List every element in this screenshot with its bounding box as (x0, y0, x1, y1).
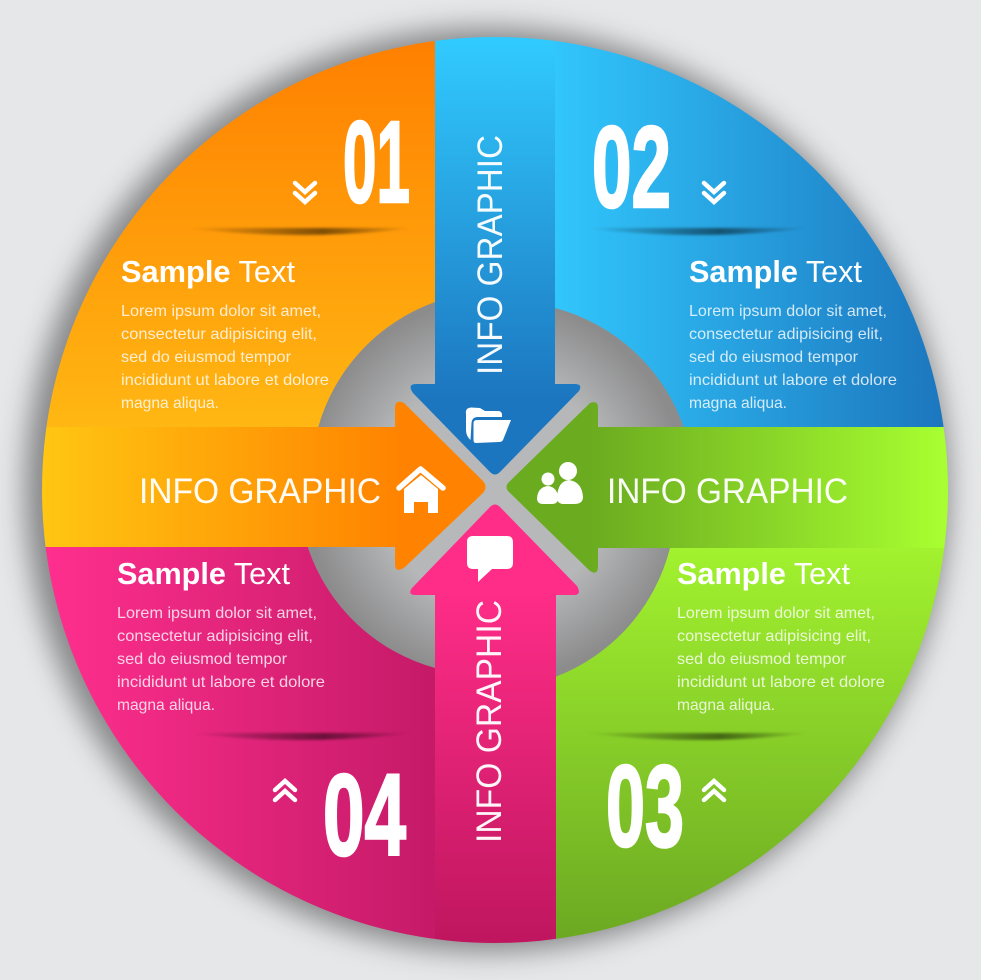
quadrant shape: pink (46, 547, 435, 939)
arrow shape: pink (410, 504, 579, 950)
label: info graphic: INFO GRAPHIC (470, 600, 509, 843)
number 01: 01 (343, 97, 410, 227)
body text (121, 303, 329, 412)
label: info graphic: INFO GRAPHIC (139, 472, 381, 511)
body text: sed do eiusmod tempor (117, 651, 288, 668)
divider shadow (583, 733, 811, 740)
panel: 02 blue quadrant (555, 41, 944, 427)
icon: chevrons down (295, 183, 315, 202)
label: info graphic: INFO GRAPHIC (607, 472, 848, 511)
arrow: orange pointing right (40, 402, 486, 570)
body text (689, 303, 897, 412)
arrow shape: orange (40, 402, 486, 570)
body text: incididunt ut labore et dolore (689, 372, 897, 389)
icon: chevrons down (704, 183, 724, 202)
body text: consectetur adipisicing elit, (677, 628, 871, 645)
body text: sed do eiusmod tempor (689, 349, 859, 366)
arrow shape: blue (411, 30, 580, 474)
body text: magna aliqua. (117, 697, 215, 714)
icon: speech bubble (467, 536, 513, 582)
body text: consectetur adipisicing elit, (121, 326, 317, 343)
panel: 01 orange quadrant (46, 41, 435, 427)
icon: folder (466, 408, 511, 443)
divider shadow (187, 733, 415, 740)
icon: chevrons up (704, 781, 724, 800)
label: info graphic: INFO GRAPHIC (471, 135, 510, 375)
quadrant shape: blue (555, 41, 944, 427)
quadrant shape: green (555, 548, 944, 939)
body text: Lorem ipsum dolor sit amet, (117, 605, 317, 622)
number 03: 03 (606, 741, 684, 871)
panel: 03 green quadrant (555, 548, 944, 939)
body text: consectetur adipisicing elit, (689, 326, 883, 343)
body text: magna aliqua. (121, 395, 219, 412)
body text (677, 605, 885, 714)
panel: 04 pink quadrant (46, 547, 435, 939)
quadrant shape: orange (46, 41, 435, 427)
arrow: pink pointing up (410, 504, 579, 950)
body text: incididunt ut labore et dolore (121, 372, 329, 389)
body text: magna aliqua. (689, 395, 787, 412)
icon: chevrons up (275, 781, 295, 800)
body text: Lorem ipsum dolor sit amet, (677, 605, 875, 622)
icon: people (537, 462, 583, 504)
heading: Sample Text (121, 254, 295, 289)
arrow: blue pointing down (411, 30, 580, 474)
inner gray circle (308, 302, 684, 677)
number 04: 04 (323, 750, 406, 880)
divider shadow (583, 228, 811, 235)
number 02: 02 (592, 102, 671, 232)
body text: sed do eiusmod tempor (121, 349, 292, 366)
body text: consectetur adipisicing elit, (117, 628, 313, 645)
body text: Lorem ipsum dolor sit amet, (689, 303, 887, 320)
body text: incididunt ut labore et dolore (117, 674, 325, 691)
body text: Lorem ipsum dolor sit amet, (121, 303, 321, 320)
body text (117, 605, 325, 714)
arrow: green pointing left (506, 402, 950, 573)
body text: magna aliqua. (677, 697, 775, 714)
heading: Sample Text (677, 556, 850, 591)
divider shadow (185, 228, 415, 235)
icon: home (399, 469, 443, 513)
heading: Sample Text (689, 254, 862, 289)
body text: sed do eiusmod tempor (677, 651, 847, 668)
arrow shape: green (506, 402, 950, 573)
body text: incididunt ut labore et dolore (677, 674, 885, 691)
heading: Sample Text (117, 556, 290, 591)
